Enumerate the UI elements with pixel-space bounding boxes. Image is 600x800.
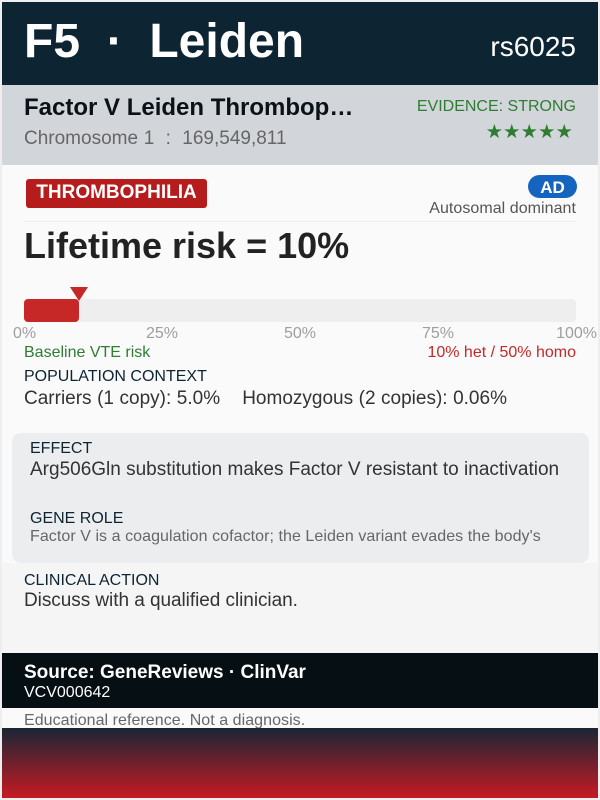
evidence label: EVIDENCE: STRONG bbox=[417, 98, 576, 115]
condition name: Factor V Leiden Thrombop… bbox=[24, 94, 353, 121]
gene role heading: GENE ROLE bbox=[30, 510, 123, 527]
source band bbox=[2, 653, 598, 708]
risk bar bbox=[13, 287, 597, 342]
evidence stars: ★★★★★ bbox=[486, 121, 573, 143]
rsID: rs6025 bbox=[490, 31, 576, 62]
effect text: Arg506Gln substitution makes Factor V resistant to inactivation bbox=[30, 459, 559, 480]
chromosome position: Chromosome 1 : 169,549,811 bbox=[24, 128, 287, 149]
header band bbox=[2, 2, 598, 85]
subheader band bbox=[2, 85, 598, 165]
divider bbox=[24, 221, 576, 222]
lower card background bbox=[2, 563, 598, 653]
carrier risk label: 10% het / 50% homo bbox=[427, 344, 576, 361]
axis labels: 100% bbox=[556, 325, 597, 342]
category badge: THROMBOPHILIA bbox=[36, 182, 197, 203]
lifetime risk heading: Lifetime risk = 10% bbox=[24, 225, 349, 266]
title: F5 · Leiden bbox=[24, 15, 304, 68]
population context heading: POPULATION CONTEXT bbox=[24, 368, 207, 385]
panel: effect and gene role bbox=[12, 433, 589, 563]
axis labels: 50% bbox=[284, 325, 316, 342]
population context values: Carriers (1 copy): 5.0% Homozygous (2 copies): 0.06% bbox=[24, 388, 507, 409]
accession id: VCV000642 bbox=[24, 684, 110, 701]
axis labels bbox=[13, 325, 597, 342]
axis labels: 0% bbox=[13, 325, 36, 342]
source text: Source: GeneReviews · ClinVar bbox=[24, 662, 306, 683]
disclaimer: Educational reference. Not a diagnosis. bbox=[24, 712, 305, 729]
marker triangle bbox=[70, 287, 88, 301]
baseline label: Baseline VTE risk bbox=[24, 344, 150, 361]
category badge bbox=[26, 179, 207, 208]
inheritance badge bbox=[528, 175, 577, 198]
clinical action text: Discuss with a qualified clinician. bbox=[24, 590, 298, 611]
axis labels: 75% bbox=[422, 325, 454, 342]
inheritance badge: AD bbox=[540, 178, 565, 197]
clinical action heading: CLINICAL ACTION bbox=[24, 572, 159, 589]
effect heading: EFFECT bbox=[30, 440, 92, 457]
bar fill bbox=[24, 299, 79, 322]
axis labels: 25% bbox=[146, 325, 178, 342]
gene role text: Factor V is a coagulation cofactor; the Leiden variant evades the body's bbox=[30, 528, 541, 545]
bar track bbox=[24, 299, 576, 322]
inheritance label: Autosomal dominant bbox=[429, 200, 576, 217]
gradient footer bbox=[2, 728, 598, 798]
